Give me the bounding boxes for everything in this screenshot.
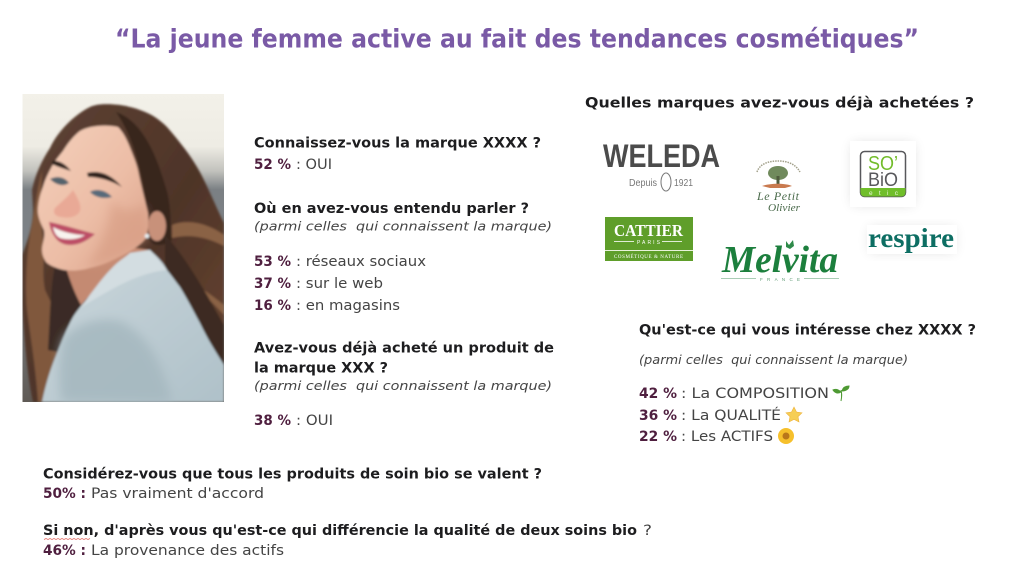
question: where heard: 37 % [254,276,291,292]
logo: Le Petit Olivier [756,161,801,214]
coat collar [80,250,167,308]
question: where heard: : réseaux sociaux [296,254,426,270]
question: purchased: Avez-vous déjà acheté un produit de [254,340,554,356]
right hair streaks [172,222,224,315]
logo: Weleda: 1921 [674,178,693,189]
question: where heard: Où en avez-vous entendu parler ? [254,201,529,217]
question: awareness: 52 % [254,157,291,173]
right panel: interests [639,322,976,445]
question: quality difference: La provenance des actifs [91,543,284,559]
logo: Melvita: Melvita [721,239,838,281]
stat: quality: : La QUALITÉ [681,407,781,424]
face [38,126,148,271]
stat: quality [639,407,802,424]
left hair light strands [25,174,58,402]
question: purchased: 38 % [254,413,291,429]
logo: So'Bio etic: etic [869,190,899,197]
coat shoulder shading [59,320,172,402]
nose [54,190,80,218]
earring [145,234,149,238]
question: purchased [254,340,554,429]
logo: So'Bio etic: BiO [868,170,898,191]
question: where heard: : sur le web [296,276,383,292]
question: all organic products alike [43,466,542,502]
logo: Weleda: WELEDA [603,138,720,174]
question: where heard: : en magasins [296,298,400,314]
stat: quality: 36 % [639,408,677,424]
question: purchased: : OUI [296,413,333,429]
stat: actives: : Les ACTIFS [681,429,773,445]
question: awareness: : OUI [296,157,332,173]
stat: actives: 22 % [639,429,677,445]
stat: composition: 42 % [639,386,677,402]
question: awareness: Connaissez-vous la marque XXXX ? [254,136,541,152]
logo: Cattier: PARIS [637,240,661,246]
question: all organic products alike: Considérez-vous que tous les produits de soin bio se valent ? [43,466,542,482]
question: all organic products alike: Pas vraiment d'accord [91,486,264,502]
logo: Cattier: CATTIER [614,221,684,240]
stat: composition: : La COMPOSITION [681,386,829,402]
hair mass [22,104,224,402]
eyebrow left [52,161,71,171]
logo: Melvita: FRANCE [760,277,800,282]
logo: Weleda [603,138,720,191]
question: purchased: (parmi celles qui connaissent la marque) [254,379,552,393]
ear [148,211,166,241]
question: quality difference: Si non, d'après vous qu'est-ce qui différencie la qualité de deux soins bio [43,523,637,539]
question: where heard: (parmi celles qui connaissent la marque) [254,220,552,234]
logo: Le Petit Olivier: Le Petit [756,189,800,203]
title: “La jeune femme active au fait des tendances cosmétiques” [115,24,919,54]
eyebrow right [87,172,122,187]
question: purchased: la marque XXX ? [254,360,388,376]
eye right [90,190,112,198]
logo: Cattier: COSMÉTIQUE & NATURE [614,254,683,260]
question: where heard [254,201,552,314]
question: quality difference: ? [643,523,652,539]
bottom questions [43,466,652,559]
dark hair near face [116,112,172,245]
eye left [50,177,69,185]
logo: Weleda: Depuis [629,178,657,189]
stat: actives [639,428,794,445]
cheek and jaw shading [94,204,152,262]
left survey questions [254,136,554,429]
teeth [53,227,85,239]
heading: interests: Qu'est-ce qui vous intéresse chez XXXX ? [639,322,976,338]
brand logos [603,138,957,282]
logo: So'Bio etic: SO’ [868,153,898,175]
logo: So'Bio etic [850,141,916,207]
stat: composition [639,386,849,402]
photo: smiling young woman [22,94,224,402]
question: where heard: 53 % [254,254,291,270]
mouth [49,222,95,245]
question: quality difference [43,523,652,559]
neck [66,248,150,305]
question: awareness [254,136,541,173]
coat [42,250,224,402]
question: all organic products alike: 50% : [43,486,86,502]
note: base of respondents: (parmi celles qui connaissent la marque) [639,353,908,367]
logo: Respire: respire [868,223,954,253]
logo: Le Petit Olivier: Olivier [768,202,801,214]
dark gap beneath chin [48,265,82,352]
logo: Cattier [605,217,693,261]
brands heading: Quelles marques avez-vous déjà achetées ? [585,96,974,112]
question: quality difference: 46% : [43,543,86,559]
question: where heard: 16 % [254,298,291,314]
